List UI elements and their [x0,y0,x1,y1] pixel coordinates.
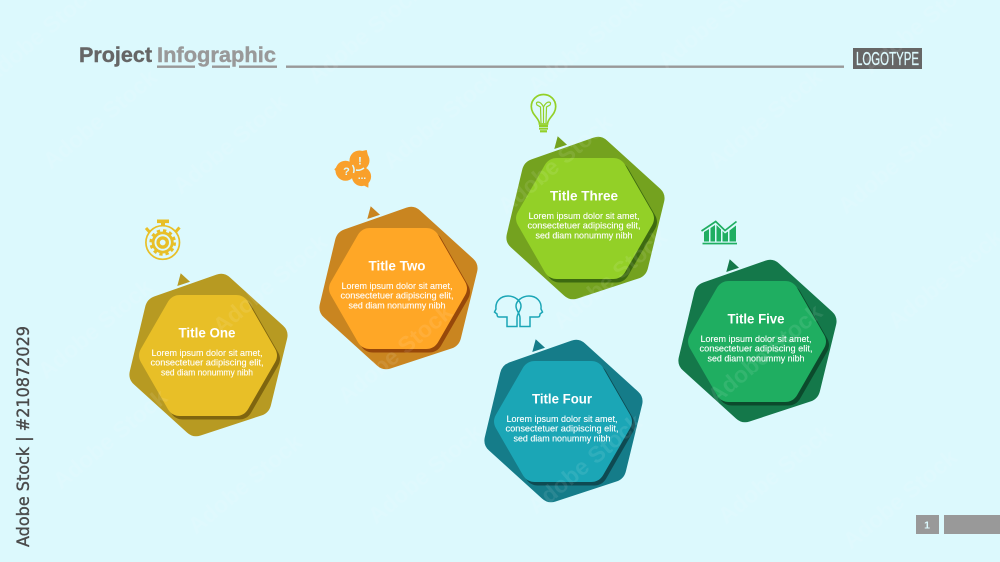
text: Adobe Stock [493,109,617,219]
text block: one [150,348,264,378]
panel: title one [129,273,288,436]
arrow marker: two [367,206,380,219]
hexagon shadow: five [691,284,829,406]
text: Adobe Stock [33,274,157,384]
icon: speech bubbles: ? [343,166,350,178]
title [79,43,277,68]
logotype: LOGOTYPE [856,49,919,69]
text: Adobe Stock [168,89,292,199]
outer hexagon: three [506,137,665,299]
icon: bar chart with trend line [702,222,737,244]
heading: title two: Title Two [368,258,426,274]
hexagon shadow: two [332,232,470,352]
icon: speech bubbles: ! [358,156,362,168]
outer hexagon: five [678,260,837,422]
text block: two: Lorem ipsum dolor sit amet, [342,281,452,292]
hexagon shadow: three [519,162,657,282]
arrow marker: five [726,259,739,272]
icon: light bulb [531,94,556,131]
hexagon shadow: four [497,364,635,486]
text block: three: consectetuer adipiscing elit, [528,221,640,232]
heading: title four: Title Four [532,390,593,406]
panel: title four [484,339,643,502]
text block: five: Lorem ipsum dolor sit amet, [700,334,812,345]
text block: one: sed diam nonummy nibh [161,368,253,378]
arrow marker: four [532,339,545,352]
panel: title five [678,259,837,422]
text block: four: Lorem ipsum dolor sit amet, [506,414,618,425]
text: Adobe Stock [838,444,962,554]
text: Adobe Stock [378,64,502,174]
inner hexagon: three [516,158,654,279]
text block: two [340,281,454,312]
text: Adobe Stock [548,224,672,334]
title: Project [79,43,152,67]
outer hexagon: two [319,207,478,369]
heading: title three: Title Three [550,188,618,204]
inner hexagon: one [139,295,277,416]
inner hexagon: five [688,281,826,402]
inner hexagon: four [494,361,632,482]
text block: four: sed diam nonummy nibh [514,434,610,444]
text block: three [528,211,640,242]
text block: four: consectetuer adipiscing elit, [506,424,618,435]
text block: one: consectetuer adipiscing elit, [150,358,264,369]
icon: two heads [494,296,542,326]
page number: 1 [924,520,930,532]
hexagon shadow: one [142,298,280,420]
text: Adobe Stock [363,419,487,529]
outer hexagon: four [484,340,643,502]
icon: speech bubbles [334,150,371,188]
text: Adobe Stock [183,429,307,539]
page number [916,515,939,534]
text: Adobe Stock [208,229,332,339]
heading: title one: Title One [178,324,236,340]
text block: two: consectetuer adipiscing elit, [340,291,454,302]
text block: five [700,334,812,364]
stock credit: Adobe Stock | #210872029 [14,326,34,547]
text block: three: sed diam nonummy nibh [536,230,632,242]
icon: speech bubbles: ... [358,171,366,182]
text: Adobe Stock [833,109,957,219]
text: Adobe Stock [38,64,162,174]
title: Infographic [157,43,276,67]
text: Adobe Stock [48,384,172,494]
text block: four [506,414,618,444]
heading: title five: Title Five [728,310,785,326]
text block: one: Lorem ipsum dolor sit amet, [152,348,262,359]
text: Adobe Stock [713,419,837,529]
inner hexagon: two [329,228,467,349]
text block: five: sed diam nonummy nibh [708,354,804,364]
panel: title two [319,206,478,369]
text block: two: sed diam nonummy nibh [348,300,446,312]
text: Adobe Stock [523,409,647,519]
text: Adobe Stock [333,299,457,409]
icon: stopwatch with gear [146,220,180,259]
arrow marker: one [177,273,190,286]
panel: title three [506,136,665,299]
text: Adobe Stock [703,64,827,174]
text block: five: consectetuer adipiscing elit, [700,344,812,355]
text block: three: Lorem ipsum dolor sit amet, [528,211,640,222]
text: Adobe Stock [703,299,827,409]
logotype [853,48,922,69]
outer hexagon: one [129,274,288,436]
arrow marker: three [554,136,567,149]
